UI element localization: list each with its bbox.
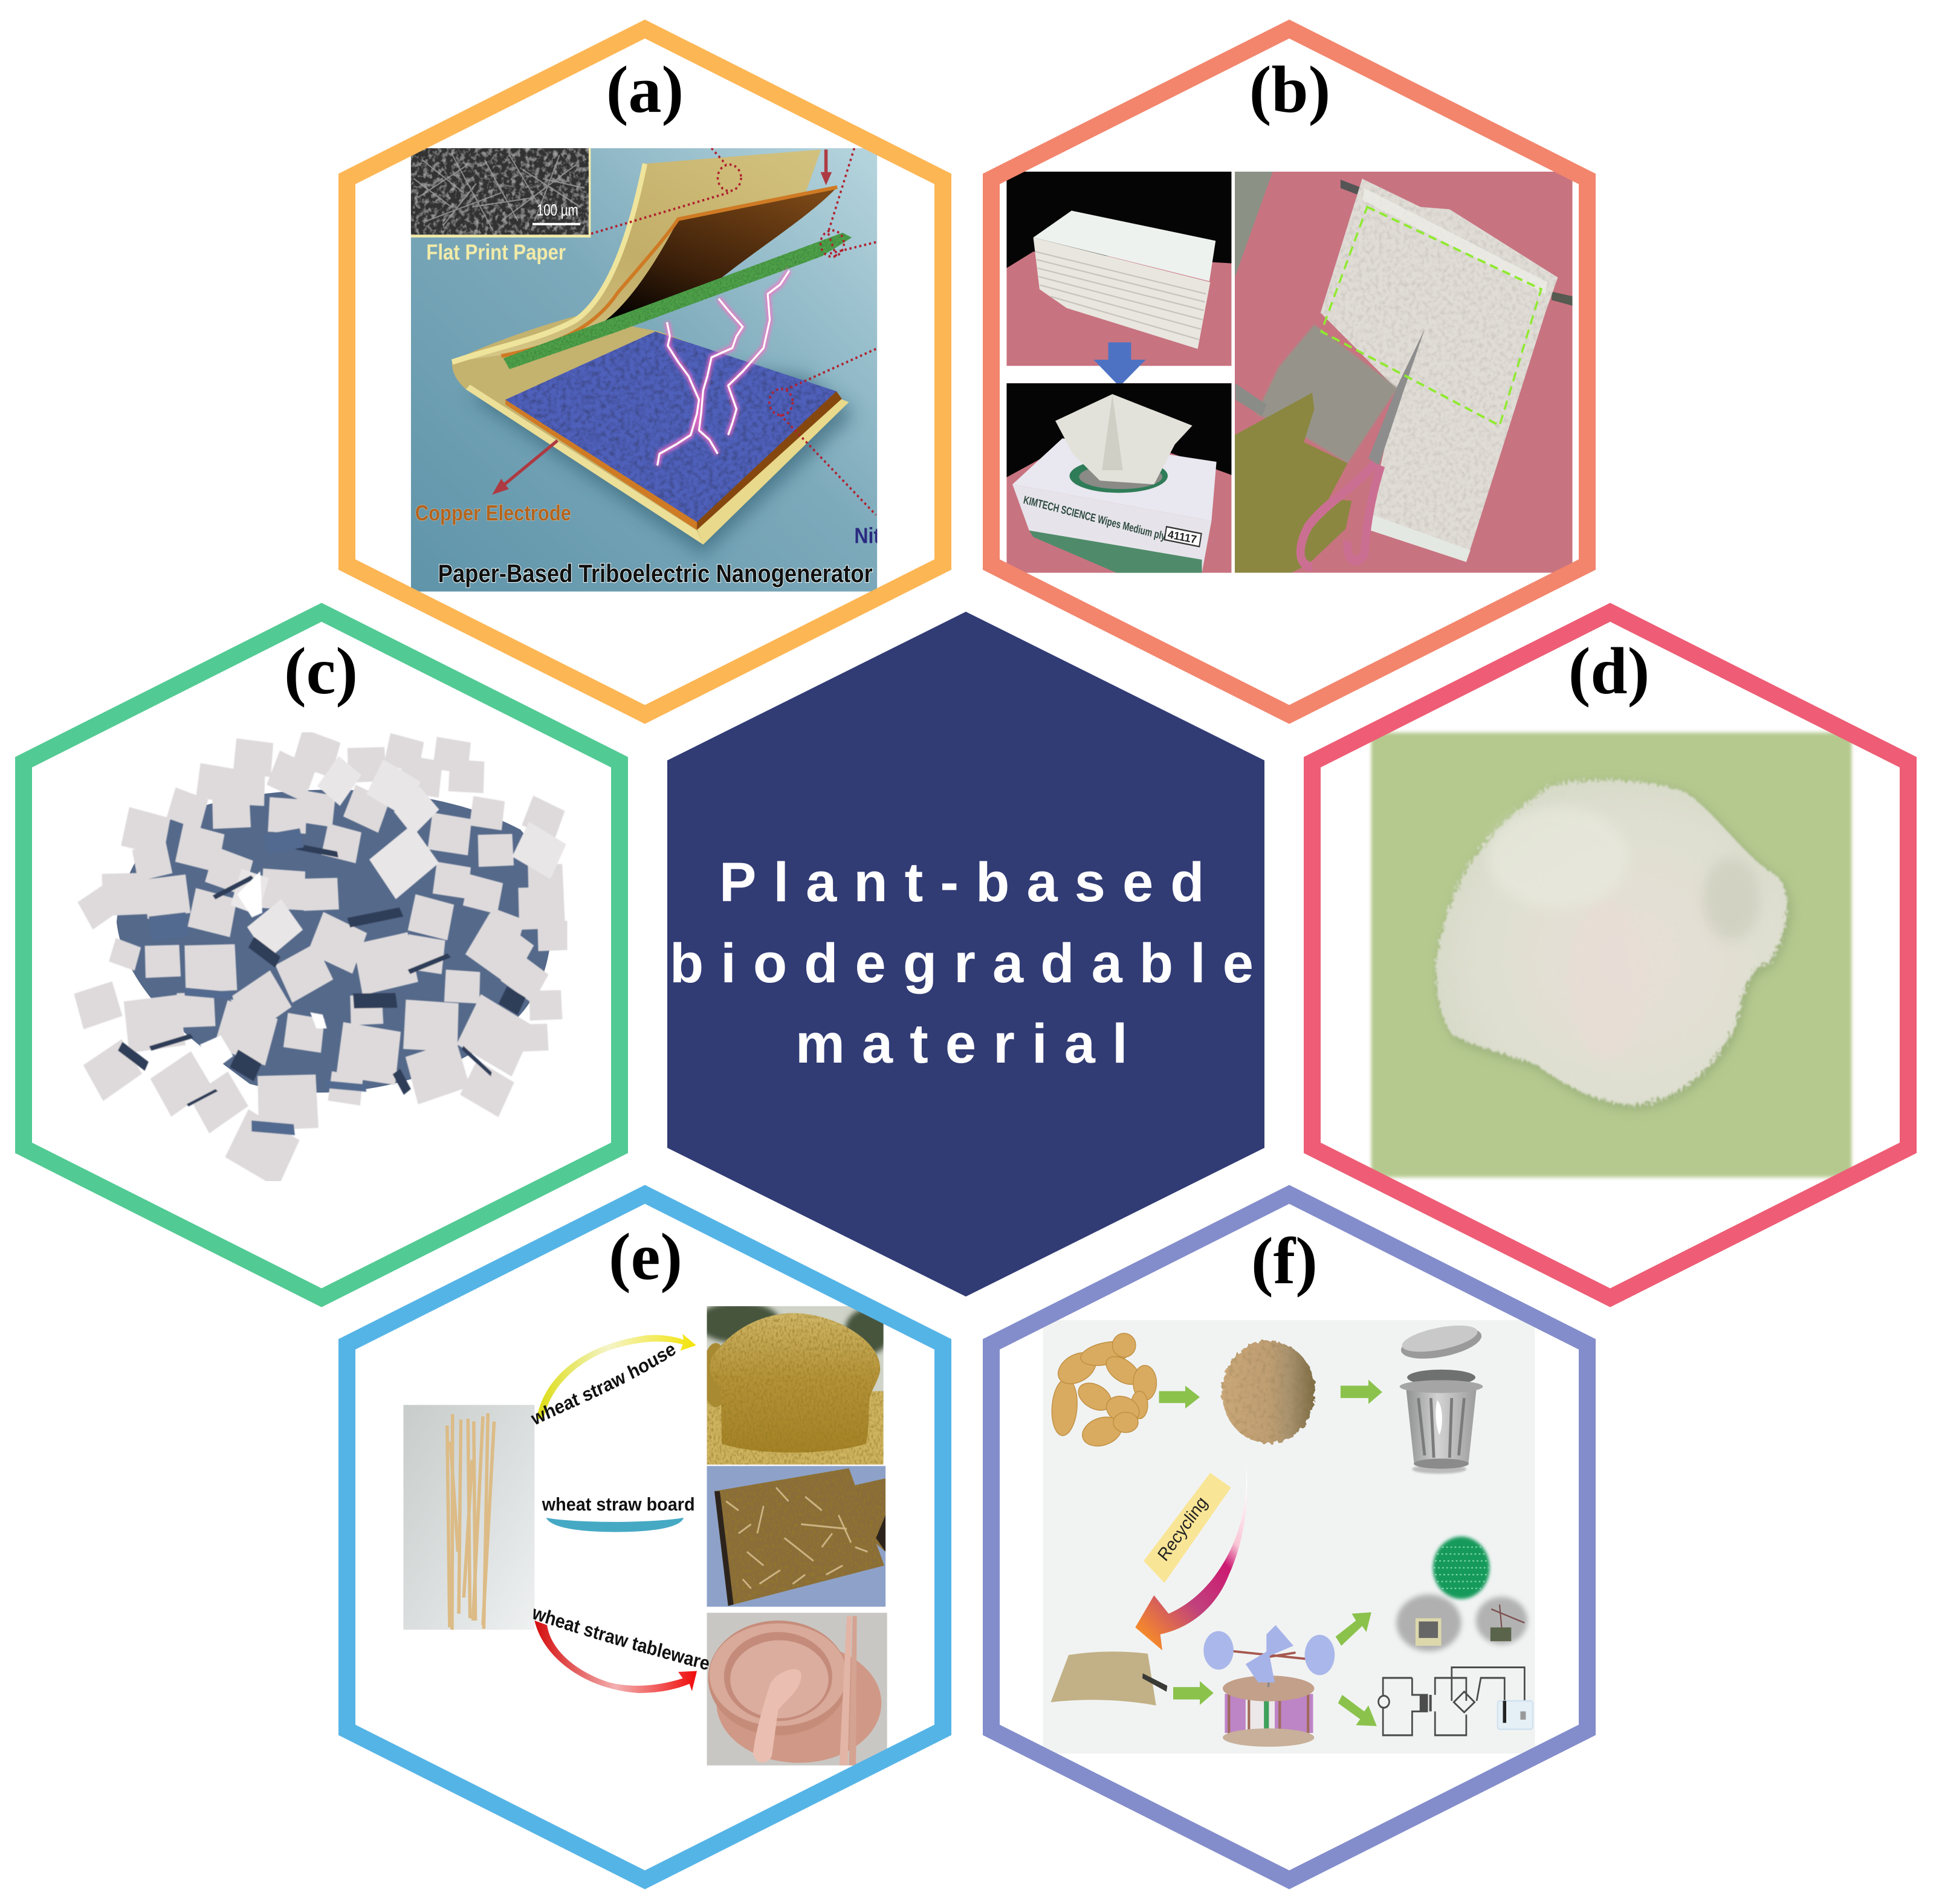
panel e: wheat straw products — [338, 1185, 951, 1889]
hexagon border d — [1312, 612, 1908, 1298]
photo: wheat straw house — [697, 1302, 890, 1465]
arrow: green down-right — [1338, 1695, 1377, 1726]
red dotted callout lines — [591, 148, 876, 515]
photo: wipe stack — [1006, 172, 1231, 366]
panel d: white powder photo — [1312, 612, 1908, 1298]
photo: wheat straw tableware — [707, 1613, 887, 1766]
icon: wind turbine device — [1203, 1625, 1335, 1747]
icon: electrolysis beaker — [1498, 1701, 1533, 1729]
icon: green LED sphere — [1433, 1536, 1489, 1599]
diagram: wheat straw uses — [404, 1306, 887, 1766]
arrow: red to tableware — [534, 1621, 697, 1693]
photo: wheat straws — [403, 1405, 534, 1630]
icon: small device photo circle — [1476, 1597, 1527, 1645]
label (a): (a) — [606, 53, 684, 126]
text: clipped Nitride label: Nit — [854, 524, 880, 548]
hexagon border a — [347, 29, 943, 714]
lightning bolts — [658, 270, 789, 465]
photo: powder on green background — [1371, 733, 1851, 1177]
panel c: paper confetti pile — [24, 612, 620, 1298]
image: nanogenerator illustration — [411, 148, 880, 592]
photo: pile of paper squares — [74, 728, 571, 1190]
hexagon border c — [24, 612, 620, 1298]
SEM inset — [411, 148, 591, 238]
arrow: green — [1173, 1681, 1214, 1705]
text: wheat straw tableware: wheat straw tableware — [533, 1608, 709, 1669]
title text: material — [795, 1013, 1145, 1075]
panel b: tissue wipes photos — [991, 29, 1587, 714]
label: Recycling tag: Recycling — [1154, 1493, 1211, 1565]
label (c): (c) — [284, 634, 358, 708]
photo: wheat straw board — [707, 1466, 885, 1607]
photo: wipes on Kimtech box: KIMTECH SCIENCE Wipes Medium ply — [1022, 493, 1167, 543]
label (d): (d) — [1568, 634, 1649, 708]
label (f): (f) — [1251, 1224, 1318, 1298]
text: image caption: Paper-Based Triboelectric Nanogenerator — [438, 560, 873, 588]
photo: cutting the wipe with scissors — [1235, 172, 1573, 573]
title text: biodegradable — [670, 933, 1270, 994]
icon: blue down arrow — [1093, 342, 1146, 387]
title text — [670, 852, 1270, 1075]
arrow: recycling curved gradient — [1135, 1460, 1247, 1650]
icon: trash can — [1399, 1321, 1484, 1474]
arrow: green — [1159, 1385, 1200, 1408]
blue nitride surface — [505, 331, 837, 522]
arc: teal board connector — [546, 1518, 684, 1532]
arrow: green up-right — [1336, 1612, 1371, 1646]
panel a: paper-based triboelectric nanogenerator — [347, 29, 943, 714]
icon: paper electrode sheet — [1050, 1651, 1167, 1705]
hexagon border b — [991, 29, 1587, 714]
gloved hand — [1235, 393, 1351, 573]
label: Recycling tag — [1144, 1473, 1231, 1583]
text: Flat Print Paper: Flat Print Paper — [426, 241, 566, 265]
icon: peanut shell powder — [1222, 1341, 1315, 1443]
green dashed guide — [1321, 207, 1541, 426]
silvered flap — [1256, 325, 1397, 463]
text: wheat straw house: wheat straw house — [531, 1345, 676, 1425]
diagram: recycling flow — [1043, 1320, 1535, 1753]
hexagon border e — [347, 1194, 943, 1880]
photo: wipes on Kimtech box — [1006, 383, 1231, 573]
title text: Plant-based — [719, 852, 1222, 913]
green mesh strip — [503, 233, 852, 369]
red arrows — [492, 149, 832, 494]
upper paper sheet — [452, 149, 821, 362]
label (e): (e) — [609, 1220, 682, 1294]
copper electrode underside — [606, 190, 835, 320]
arrow: yellow to house — [537, 1334, 696, 1419]
scissors — [1368, 329, 1425, 465]
icon: thermometer photo circle — [1396, 1595, 1461, 1651]
icon: peanuts — [1050, 1333, 1156, 1451]
SEM inset: 100 µm — [537, 201, 578, 219]
photo: wipes on Kimtech box: 41117 — [1167, 528, 1198, 546]
hexagon border f — [991, 1194, 1587, 1880]
diagram: rectifier circuit — [1379, 1667, 1524, 1735]
central hexagon title — [667, 612, 1270, 1297]
arrow: green — [1341, 1380, 1382, 1404]
text: wheat straw board: wheat straw board — [542, 1495, 695, 1515]
text: Copper Electrode: Copper Electrode — [415, 501, 571, 526]
panel f: peanut shell recycling — [991, 1194, 1587, 1880]
navy hexagon — [667, 612, 1264, 1297]
label (b): (b) — [1249, 53, 1330, 126]
